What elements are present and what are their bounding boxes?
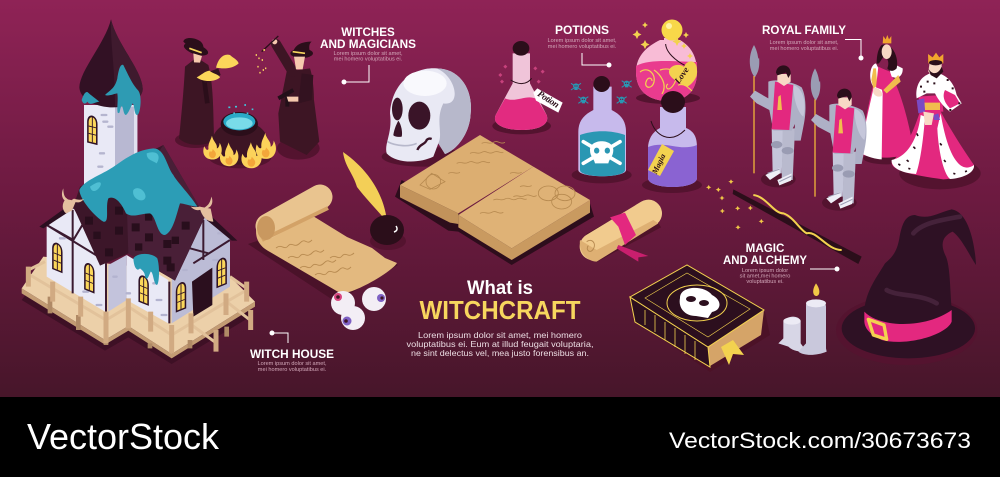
callout: witch house: WITCH HOUSE <box>250 348 334 361</box>
roof <box>73 145 205 281</box>
callout: witch house: Lorem ipsum dolor sit amet, <box>257 361 327 367</box>
love potion bottle: Love <box>672 65 691 86</box>
tower roof <box>79 19 143 107</box>
door <box>192 268 212 317</box>
intro text block: ne sint delectus vel, mea justo forensibus an. <box>411 348 589 358</box>
intro text block: Lorem ipsum dolor sit amet, mei homero <box>418 330 582 340</box>
wall stones <box>53 233 223 315</box>
right wall <box>172 217 230 323</box>
windows <box>52 241 227 313</box>
candles <box>778 283 827 355</box>
love potion bottle <box>632 20 700 104</box>
queen <box>862 35 913 164</box>
timber beams <box>47 210 230 323</box>
witch two <box>256 36 320 160</box>
parchment sheet <box>256 208 397 293</box>
footer image id: VectorStock.com/30673673 <box>669 428 971 453</box>
poison bottle with skull <box>571 76 632 183</box>
bookmark <box>721 340 744 365</box>
fence <box>28 262 251 353</box>
roll <box>268 197 320 226</box>
cauldron <box>203 105 276 168</box>
open book <box>395 135 594 265</box>
callout: witch house <box>250 330 334 373</box>
knight one <box>750 45 805 187</box>
magic wand with stars <box>706 179 862 264</box>
illustration: skull spellbook <box>630 265 770 372</box>
intro text block: voluptatibus ei. Eum at illud feugait voluptaria, <box>406 339 594 349</box>
callout: royal family: Lorem ipsum dolor sit amet, <box>769 40 839 46</box>
bull skull left <box>62 188 84 213</box>
potion flask <box>492 41 563 134</box>
skull <box>382 68 471 167</box>
callout: potions: Lorem ipsum dolor sit amet, <box>547 38 617 44</box>
illustration: parchment scroll with quill <box>248 152 406 302</box>
potion flask: Potion <box>535 89 560 111</box>
wooden deck <box>22 257 255 358</box>
handwriting <box>276 240 354 275</box>
callout: magic and alchemy: Lorem ipsum dolor <box>742 268 788 274</box>
purple magic bottle <box>642 91 702 193</box>
inkwell <box>370 215 406 250</box>
bull skull right <box>191 197 213 222</box>
callout: magic and alchemy: sit amet,mei homero <box>740 274 790 280</box>
scroll shadow <box>248 230 398 302</box>
callout: magic and alchemy: voluptatibus ei. <box>746 279 784 285</box>
callout: witches and magicians <box>320 26 416 84</box>
callout: witch house: mei homero voluptatibus ei. <box>258 367 327 373</box>
callout: witches and magicians: mei homero voluptatibus ei. <box>334 56 403 62</box>
callout: magic and alchemy: AND ALCHEMY <box>723 254 807 267</box>
callout: witches and magicians: WITCHES <box>341 26 395 39</box>
callout: potions <box>547 24 617 68</box>
left wall <box>47 207 105 312</box>
title: What is <box>467 278 533 299</box>
roof slime <box>79 148 197 285</box>
tower slime <box>82 65 141 115</box>
purple magic bottle: Magia <box>650 152 667 176</box>
tower <box>84 105 137 187</box>
callout: potions: mei homero voluptatibus ei. <box>548 44 617 50</box>
callout: magic and alchemy <box>723 242 840 285</box>
front wall <box>127 255 168 323</box>
illustration: witch house <box>22 19 255 364</box>
callout: royal family: mei homero voluptatibus ei. <box>770 46 839 52</box>
title <box>420 278 581 325</box>
footer bar <box>0 397 1000 477</box>
roof gables <box>39 203 237 241</box>
title: WITCHCRAFT <box>420 295 581 325</box>
witch one <box>175 38 239 148</box>
callout: witches and magicians: Lorem ipsum dolor sit amet, <box>333 51 403 57</box>
callout: royal family <box>762 24 864 60</box>
king <box>892 53 981 189</box>
intro text block <box>406 330 594 358</box>
callout: magic and alchemy: MAGIC <box>746 242 785 255</box>
callout: witches and magicians: AND MAGICIANS <box>320 38 416 51</box>
callout: potions: POTIONS <box>555 24 609 37</box>
quill feather <box>343 152 387 222</box>
icon: eyeballs <box>331 287 386 330</box>
illustration: witches and cauldron <box>175 36 320 168</box>
witch hat <box>836 209 977 365</box>
deck shadow <box>22 267 253 364</box>
small rolled scroll <box>580 201 661 262</box>
callout: royal family: ROYAL FAMILY <box>762 24 846 37</box>
centre wall shaded <box>108 255 127 312</box>
footer logo text: VectorStock <box>27 416 220 457</box>
knight two <box>811 68 866 211</box>
